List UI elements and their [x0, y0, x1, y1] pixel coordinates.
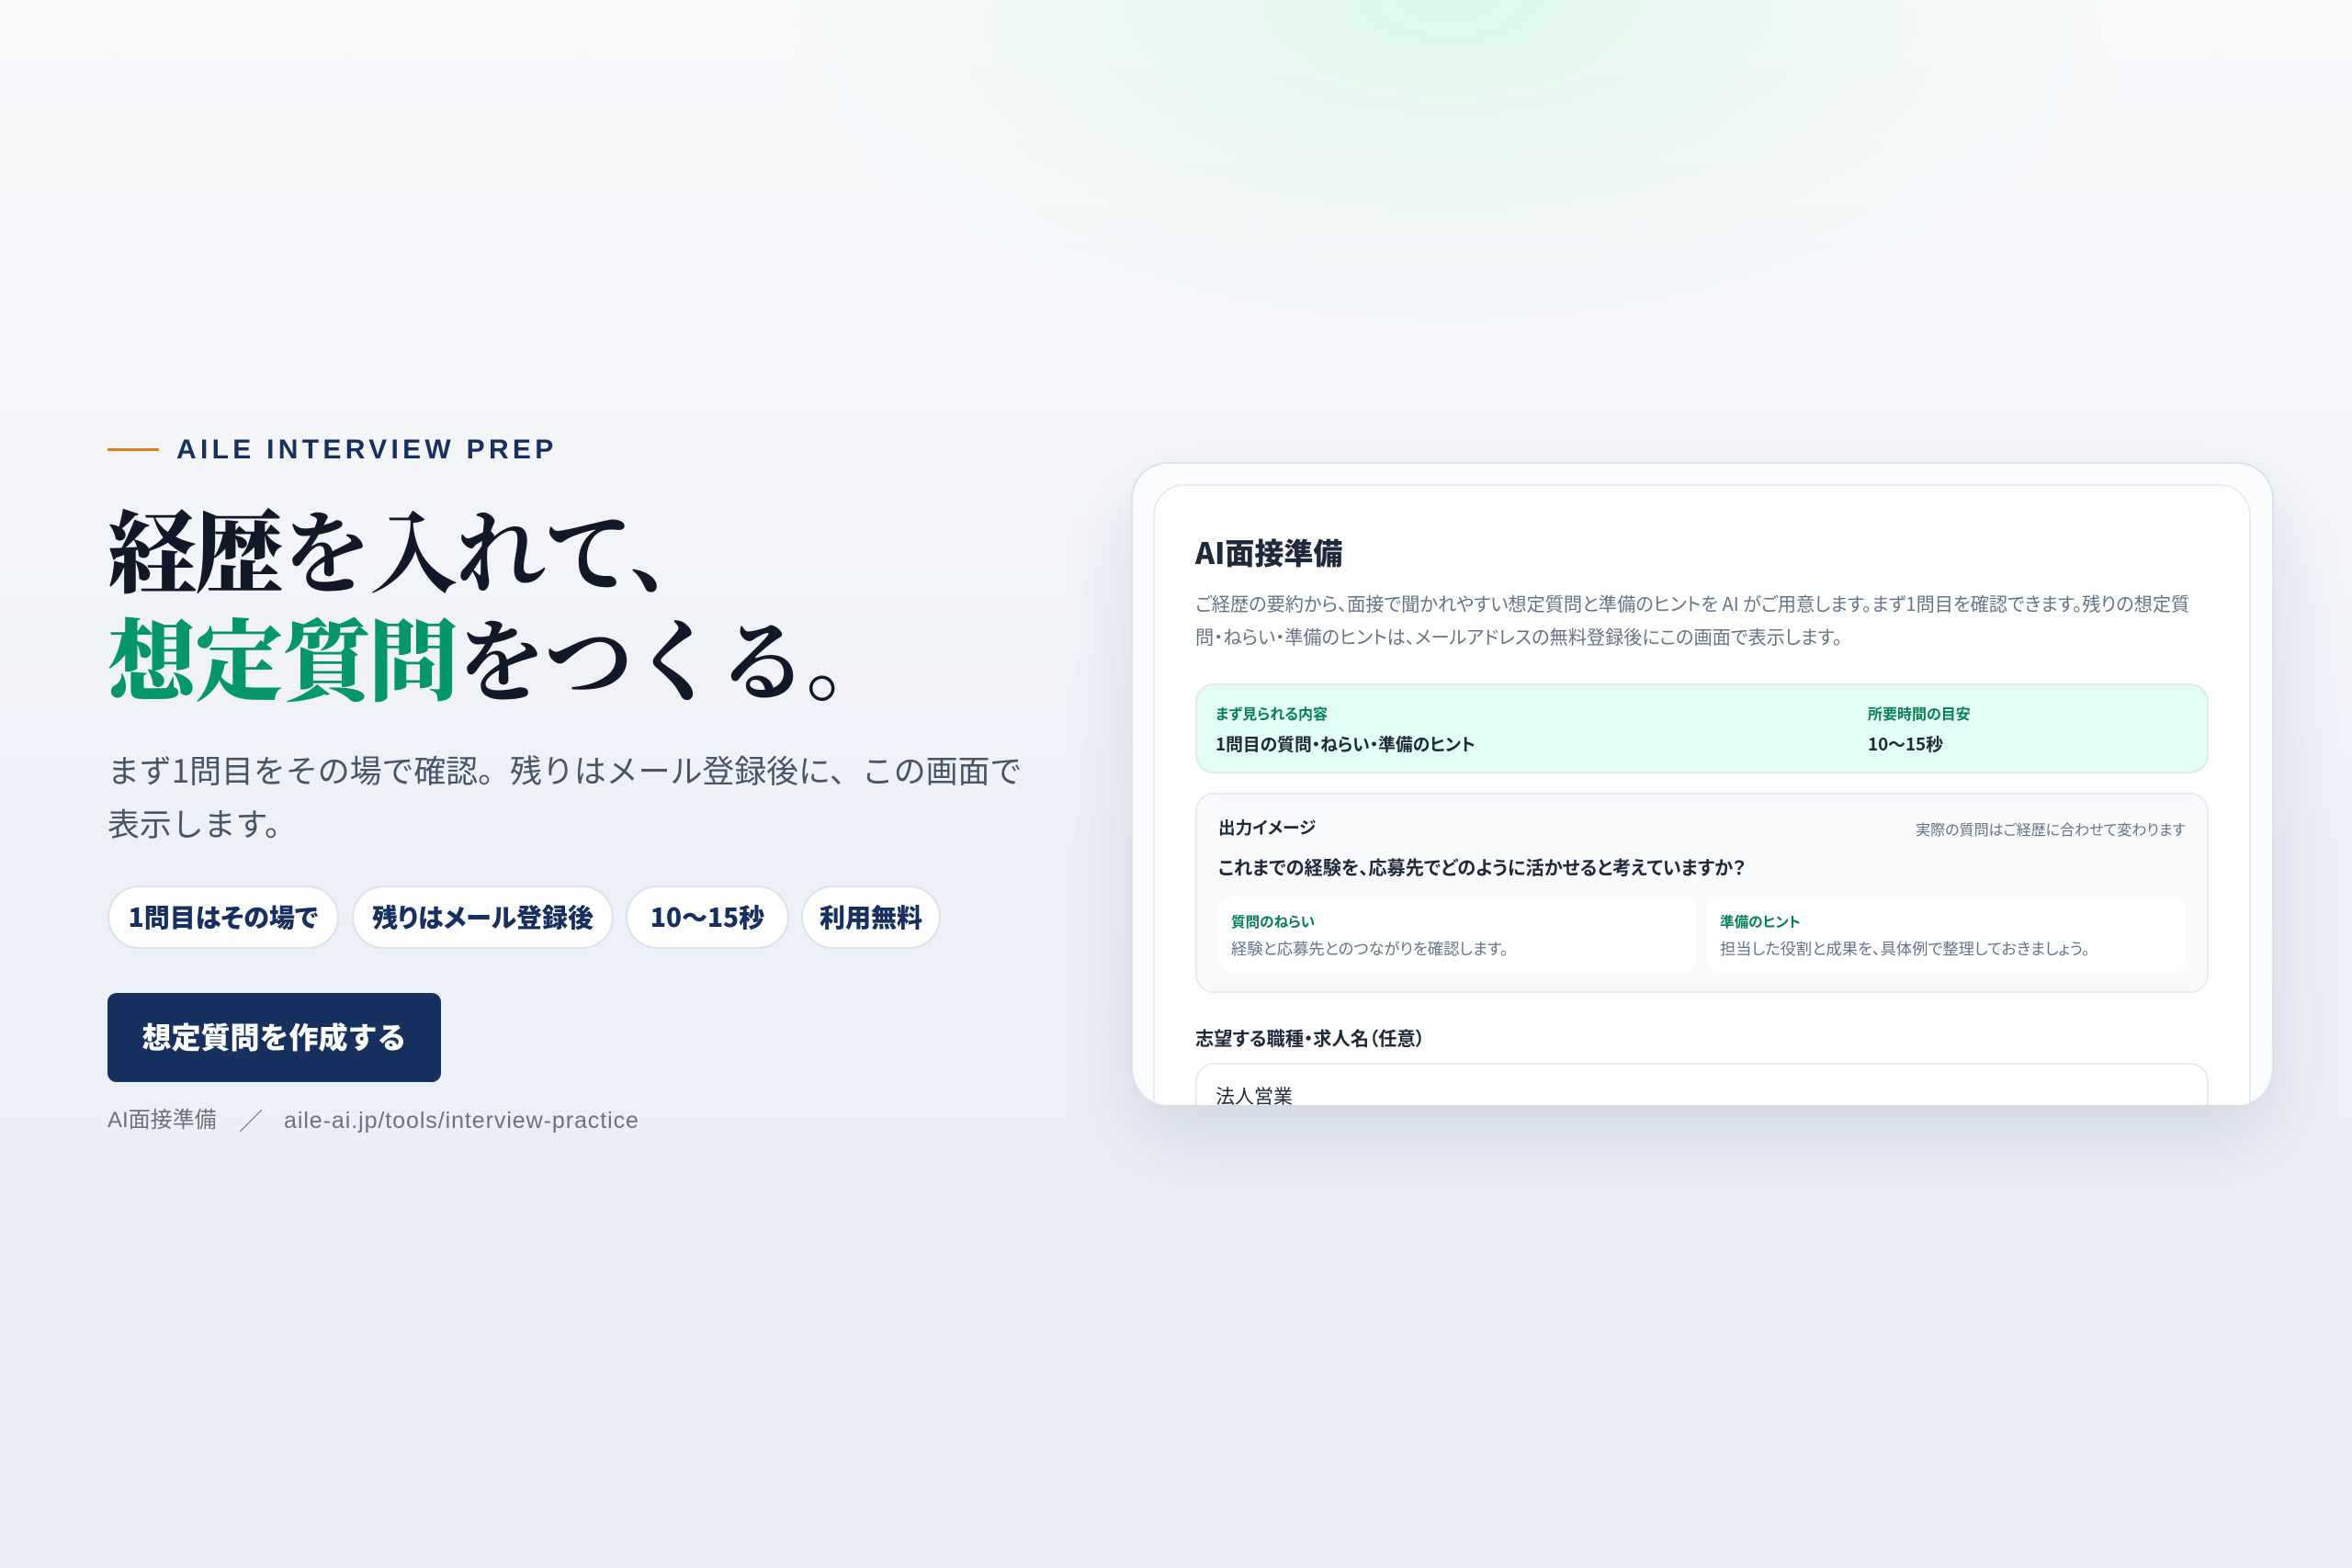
hint label: 準備のヒント [1720, 911, 1801, 931]
title: 想定質問をつくる。 [107, 590, 893, 718]
chip: free: 利用無料 [820, 898, 922, 935]
eyebrow text: AILE INTERVIEW PREP [176, 434, 558, 465]
chip: after registration [352, 886, 614, 949]
eyebrow rule [107, 448, 159, 451]
app description: 問・ねらい・準備のヒントは、メールアドレスの無料登録後にこの画面で表示します。 [1195, 623, 1842, 649]
footer url: aile-ai.jp/tools/interview-practice [284, 1108, 639, 1134]
sample note: 実際の質問はご経歴に合わせて変わります [1916, 818, 2186, 840]
app description [1195, 590, 2189, 649]
panel: inner app card [1153, 484, 2251, 1149]
cta button [107, 993, 441, 1082]
value: what you see first: 1問目の質問・ねらい・準備のヒント [1216, 731, 1476, 756]
value: time estimate: 10〜15秒 [1868, 731, 1943, 756]
panel: summary box [1195, 683, 2209, 773]
subtitle [107, 747, 1022, 846]
label: time estimate: 所要時間の目安 [1868, 702, 1971, 724]
label: what you see first: まず見られる内容 [1216, 702, 1328, 724]
chip: duration [626, 886, 789, 949]
sample question: これまでの経験を、応募先でどのように活かせると考えていますか？ [1218, 853, 1746, 880]
title [107, 482, 893, 718]
chip: free [801, 886, 941, 949]
app title: AI面接準備 [1195, 531, 1342, 573]
sample heading: 出力イメージ [1218, 815, 1316, 840]
aim label: 質問のねらい [1231, 911, 1315, 931]
subtitle: まず1問目をその場で確認。残りはメール登録後に、この画面で [107, 747, 1022, 793]
panel: product screenshot [1131, 462, 2274, 1105]
chip: duration: 10〜15秒 [650, 898, 764, 935]
input field [1195, 1063, 2209, 1149]
subcard: question aim [1218, 897, 1696, 973]
aim body: 経験と応募先とのつながりを確認します。 [1231, 936, 1508, 959]
field label: 志望する職種・求人名（任意） [1195, 1023, 1425, 1051]
subcard: preparation hint [1707, 897, 2186, 973]
footer name: AI面接準備 [107, 1108, 217, 1133]
cta button: 想定質問を作成する [141, 1015, 406, 1057]
title: 経歴を入れて、 [107, 482, 717, 611]
hint body: 担当した役割と成果を、具体例で整理しておきましょう。 [1720, 936, 2090, 959]
panel: output sample [1195, 793, 2209, 993]
footer slash: ／ [239, 1103, 263, 1137]
chip: first question [107, 886, 339, 949]
footer source [107, 1103, 639, 1137]
chip: first question: 1問目はその場で [129, 898, 318, 935]
chip: after registration: 残りはメール登録後 [372, 898, 594, 935]
app description: ご経歴の要約から、面接で聞かれやすい想定質問と準備のヒントを AI がご用意します。まず1問目を確認できます。残りの想定質 [1195, 590, 2189, 616]
subtitle: 表示します。 [107, 800, 297, 846]
